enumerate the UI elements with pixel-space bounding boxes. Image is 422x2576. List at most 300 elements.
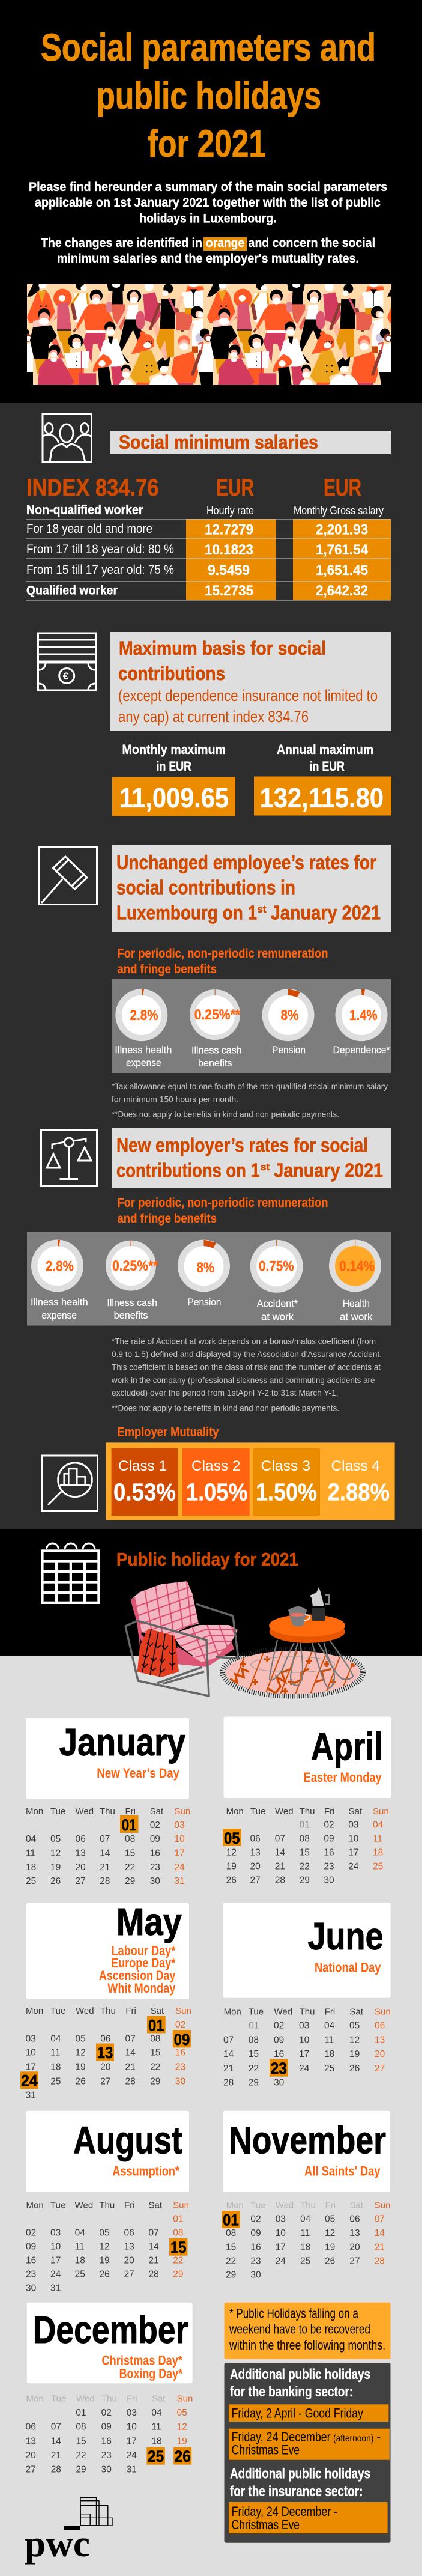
calendar grid: August: 18 [75, 2255, 85, 2265]
calendar grid: December: 23 [101, 2450, 112, 2461]
calendar grid: August: Fri [124, 2200, 134, 2210]
calendar grid: April: 06 [250, 1833, 261, 1844]
calendar grid: August: Mon [26, 2200, 44, 2210]
logo: pwc: pwc [25, 2524, 90, 2565]
calendar grid: August: 01 [173, 2214, 184, 2224]
calendar grid: April: 19 [226, 1861, 237, 1871]
calendar grid: August: 03 [50, 2228, 61, 2238]
changes note with orange highlight [41, 236, 375, 266]
footnotes: employer rates: work in the company (professional sickness and commuting accidents are [111, 1375, 375, 1385]
calendar grid: June: 03 [299, 2021, 309, 2031]
calendar grid: June: 23 [270, 2059, 287, 2077]
donut: accident at work: at work [261, 1311, 294, 1323]
subheading: employer remuneration: For periodic, non-periodic remuneration [118, 1196, 328, 1210]
calendar grid: November: 16 [250, 2242, 261, 2252]
donut: pension: 8% [197, 1260, 214, 1276]
intro text [29, 180, 387, 226]
monthly salaries: 1,651.45 [316, 562, 368, 579]
intro text: Please find hereunder a summary of the main social parameters [29, 180, 387, 194]
calendar grid: May: Sat [151, 2006, 164, 2016]
icon: gavel [40, 847, 97, 905]
calendar card: May: May [116, 1900, 182, 1943]
calendar grid: January: 06 [76, 1834, 86, 1844]
calendar grid: December: 06 [26, 2422, 36, 2432]
calendar grid: August: 02 [26, 2228, 36, 2238]
calendar card: November: All Saints' Day [304, 2164, 381, 2179]
calendar grid: April: 17 [348, 1847, 358, 1858]
title [41, 26, 376, 165]
changes note with orange highlight: orange [206, 236, 244, 250]
calendar grid: November: 09 [250, 2228, 261, 2238]
panel: maximum basis heading [110, 632, 391, 731]
hourly rates: 9.5459 [208, 562, 250, 579]
calendar grid: November: 24 [276, 2256, 286, 2266]
calendar grid: December: 07 [51, 2422, 61, 2432]
panel: employer rates heading: st [261, 1161, 270, 1173]
donut: illness health expense: 2.8% [46, 1259, 74, 1275]
calendar grid: August: 30 [26, 2283, 37, 2293]
calendar grid: June: 05 [349, 2021, 360, 2031]
calendar grid: May: 30 [175, 2076, 186, 2086]
calendar grid: December: 27 [26, 2465, 36, 2475]
calendar grid: December: 08 [76, 2422, 86, 2432]
donut: pension: 8% [281, 1007, 299, 1024]
calendar grid: June: 14 [223, 2049, 234, 2059]
calendar grid: April: 11 [373, 1833, 382, 1844]
calendar grid: January: 03 [174, 1820, 185, 1830]
calendar grid: August: Sat [149, 2200, 163, 2210]
hourly rates: 10.1823 [205, 542, 253, 558]
calendar grid: April: 07 [275, 1833, 285, 1844]
calendar grid: December: 29 [76, 2465, 86, 2475]
calendar grid: May: 05 [76, 2034, 86, 2044]
calendar grid: May: 29 [150, 2076, 160, 2086]
calendar grid: April: 03 [348, 1820, 358, 1830]
calendar grid: May: Fri [125, 2006, 136, 2016]
donut: health at work: Health [343, 1298, 370, 1310]
calendar grid: April: Mon [226, 1806, 244, 1817]
calendar grid: January: 19 [50, 1862, 61, 1873]
calendar card: January: New Year’s Day [97, 1766, 180, 1781]
calendar grid: December: 19 [177, 2436, 187, 2446]
calendar grid: November: 01 [223, 2211, 239, 2229]
donut: illness health expense: 2.8% [130, 1007, 158, 1024]
subheading: employer remuneration: and fringe benefits [118, 1212, 217, 1226]
monthly salaries: 1,761.54 [316, 542, 369, 558]
hourly rates [205, 521, 253, 599]
calendar grid: January: 21 [100, 1862, 110, 1873]
calendar grid: January: 23 [150, 1862, 160, 1873]
hourly rates: 12.7279 [205, 521, 253, 538]
calendar grid: May: 27 [100, 2076, 110, 2086]
calendar grid: January: 17 [174, 1848, 185, 1859]
calendar grid: August: 10 [50, 2241, 61, 2252]
calendar grid: August: 05 [99, 2228, 110, 2238]
calendar grid: December: 15 [76, 2436, 86, 2446]
calendar grid: January: 02 [150, 1820, 160, 1830]
calendar grid: April: 25 [373, 1861, 383, 1871]
calendar grid: January: 04 [26, 1834, 37, 1844]
calendar grid: April: 04 [373, 1820, 384, 1830]
footnotes: employee rates: **Does not apply to benefits in kind and non periodic payments. [112, 1109, 339, 1119]
calendar grid: December: Fri [127, 2394, 137, 2404]
calendar card: December: Christmas Day* [102, 2353, 182, 2368]
donut: illness cash benefits [106, 1241, 158, 1321]
calendar grid: April: 27 [250, 1875, 261, 1885]
calendar grid: August: 13 [124, 2241, 134, 2252]
calendar grid: January: 15 [125, 1848, 135, 1859]
calendar grid: June: 20 [375, 2049, 385, 2059]
panel: employee rates heading: social contributions in [116, 876, 295, 899]
calendar grid: November: 06 [349, 2214, 360, 2225]
calendar grid: April: 30 [324, 1875, 334, 1885]
calendar grid: January: 13 [76, 1848, 86, 1859]
calendar card: May: Labour Day* [112, 1943, 176, 1958]
footnotes: employer rates: This coefficient is based on the class of risk and the number of accidents at [112, 1362, 381, 1372]
calendar grid: June: 08 [249, 2035, 259, 2045]
donut: illness health expense: expense [42, 1310, 77, 1321]
calendar grid: January: Wed [76, 1806, 94, 1817]
donut: dependence: 1.4% [349, 1007, 378, 1024]
calendar grid: January: 16 [150, 1848, 160, 1859]
calendar grid: June: 15 [249, 2049, 259, 2059]
calendar grid: December: 14 [51, 2436, 61, 2446]
calendar grid: November: 27 [349, 2256, 360, 2266]
calendar card: June [223, 1903, 391, 1998]
donut: illness cash benefits [190, 989, 242, 1069]
subheading: employee remuneration: For periodic, non-periodic remuneration [118, 947, 328, 961]
panel: employer rates heading [112, 1128, 391, 1188]
donut: illness health expense [31, 1240, 88, 1321]
calendar grid: August: 22 [173, 2255, 184, 2265]
donut: illness cash benefits: Illness cash [107, 1297, 157, 1308]
calendar grid: May: Wed [76, 2006, 94, 2016]
calendar grid: December: 28 [51, 2465, 61, 2475]
panel: maximum basis heading: contributions [118, 663, 225, 684]
calendar grid: August: 15 [170, 2238, 186, 2256]
calendar grid: June: Wed [274, 2007, 292, 2017]
calendar grid: May: 21 [125, 2062, 136, 2072]
calendar grid: May: Mon [26, 2006, 43, 2016]
table header: EUR [216, 475, 254, 501]
callout: weekend recovery note: weekend have to be recovered [229, 2321, 370, 2336]
calendar grid: January: 09 [150, 1834, 160, 1844]
calendar grid: May: Thu [100, 2006, 116, 2016]
calendar grid: April: 18 [373, 1847, 383, 1858]
calendar grid: November: 07 [375, 2214, 385, 2225]
calendar grid: June: 29 [249, 2078, 259, 2088]
calendar grid: May: 23 [175, 2062, 185, 2072]
calendar card: May: Ascension Day [99, 1968, 176, 1983]
donut: illness cash benefits: Illness cash [191, 1044, 242, 1056]
calendar grid: November: 11 [300, 2228, 310, 2238]
calendar grid: November: Sun [375, 2200, 390, 2210]
class 2 [182, 1448, 250, 1516]
icon: banknote: € [63, 670, 69, 682]
class 4: Class 4 [331, 1458, 380, 1474]
calendar card: June: National Day [315, 1960, 381, 1975]
calendar grid: May: 18 [50, 2062, 61, 2072]
panel: maximum basis heading: any cap) at current index 834.76 [118, 708, 309, 726]
calendar grid: April: 26 [226, 1875, 237, 1885]
calendar card: January [26, 1718, 189, 1799]
calendar grid: January: 28 [100, 1876, 110, 1886]
calendar grid: August: 08 [173, 2228, 184, 2238]
calendar grid: November: 08 [226, 2228, 236, 2238]
row labels: From 15 till 17 year old: 75 % [26, 563, 174, 577]
calendar grid: August: 06 [124, 2228, 134, 2238]
calendar grid: August: 04 [75, 2228, 85, 2238]
icon: calendar [41, 1543, 100, 1604]
calendar grid: April: 01 [300, 1820, 310, 1830]
footnotes: employer rates: excluded) over the period from 1stApril Y-2 to 31st March Y-1. [112, 1388, 339, 1397]
donut: health at work [329, 1240, 381, 1323]
calendar grid: June: 13 [375, 2035, 385, 2045]
calendar grid: May: 28 [125, 2076, 136, 2086]
calendar grid: May: 19 [76, 2062, 86, 2072]
calendar grid: May: 17 [26, 2062, 36, 2072]
calendar grid: January [26, 1806, 190, 1886]
calendar grid: August: Sun [173, 2200, 189, 2210]
heading: insurance sector [230, 2466, 370, 2500]
donut: pension: Pension [187, 1296, 221, 1308]
footnotes: employee rates: for minimum 150 hours per month. [112, 1094, 238, 1104]
donut: dependence [333, 989, 390, 1056]
calendar grid: April: Fri [324, 1806, 335, 1817]
calendar grid: June: 10 [299, 2035, 310, 2045]
calendar grid: June: 06 [375, 2021, 385, 2031]
stat: annual maximum: 132,115.80 [260, 782, 384, 813]
calendar grid: May: 07 [125, 2034, 136, 2044]
calendar grid: June: 25 [324, 2064, 334, 2074]
calendar grid: January: Tue [50, 1806, 65, 1817]
table header: Monthly Gross salary [294, 505, 384, 517]
calendar grid: June: Tue [249, 2007, 264, 2017]
donut: illness health expense: expense [126, 1057, 161, 1069]
class 3: Class 3 [261, 1458, 310, 1474]
calendar grid: April: 15 [300, 1847, 310, 1858]
heading: banking sector: for the banking sector: [230, 2384, 353, 2400]
item: christmas eve afternoon: Christmas Eve [232, 2443, 300, 2458]
calendar grid: November: 04 [300, 2214, 311, 2225]
calendar grid: May: 14 [125, 2048, 136, 2058]
item: christmas eve afternoon [229, 2429, 390, 2460]
calendar grid: January: 24 [174, 1862, 185, 1873]
calendar grid: November: Thu [300, 2200, 316, 2210]
calendar grid: December: Wed [76, 2394, 95, 2404]
calendar grid: June: 04 [324, 2021, 335, 2031]
calendar grid: April: 10 [348, 1833, 359, 1844]
calendar grid: May: 16 [175, 2048, 185, 2058]
panel: employer rates heading: contributions on 1 [116, 1159, 260, 1182]
panel: employee rates heading: Unchanged employee’s rates for [116, 851, 376, 873]
calendar grid: April: 02 [324, 1820, 334, 1830]
class 2: 1.05% [186, 1478, 247, 1505]
calendar card: April: April [311, 1725, 383, 1768]
calendar grid: May: 09 [174, 2031, 190, 2049]
class 1: Class 1 [118, 1458, 167, 1474]
calendar grid: April [223, 1806, 389, 1885]
calendar grid: April: 16 [324, 1847, 334, 1858]
calendar grid: January: 01 [122, 1816, 137, 1834]
calendar grid: November: Fri [325, 2200, 336, 2210]
calendar grid: January: Fri [125, 1806, 136, 1817]
calendar grid: November: 02 [250, 2214, 261, 2225]
panel: employee rate donuts [112, 979, 391, 1073]
calendar grid: December: 02 [101, 2408, 112, 2418]
calendar grid: May: 13 [97, 2044, 113, 2062]
calendar grid: November: 30 [250, 2270, 261, 2280]
calendar grid: June: 02 [274, 2021, 284, 2031]
calendar grid: December: 17 [127, 2436, 137, 2446]
icon: banknote [38, 633, 96, 690]
icon: magnifier over chart [42, 1456, 97, 1511]
calendar grid: May: 31 [26, 2091, 36, 2101]
calendar grid: August: 26 [99, 2269, 110, 2279]
calendar grid: December [26, 2394, 193, 2475]
calendar grid: August: 25 [75, 2269, 85, 2279]
changes note with orange highlight: The changes are identified in [41, 236, 202, 250]
calendar grid: August: 27 [124, 2269, 134, 2279]
calendar grid: November: Mon [226, 2200, 244, 2210]
donut: illness health expense [115, 989, 172, 1069]
calendar grid: November [222, 2200, 390, 2280]
calendar grid: January: Sat [150, 1806, 164, 1817]
calendar grid: January: 07 [100, 1834, 110, 1844]
item: christmas eve: Christmas Eve [232, 2517, 300, 2532]
footnotes: employer rates: **Does not apply to benefits in kind and non periodic payments. [112, 1403, 339, 1413]
title: public holidays [96, 74, 321, 117]
intro text: holidays in Luxembourg. [139, 211, 276, 226]
item: christmas eve: Friday, 24 December - [232, 2504, 337, 2519]
calendar grid: December: 20 [26, 2450, 36, 2461]
calendar grid: August [26, 2200, 189, 2293]
donut: illness cash benefits: benefits [114, 1310, 148, 1321]
calendar grid: November: 28 [375, 2256, 385, 2266]
changes note with orange highlight: minimum salaries and the employer's mutuality rates. [57, 252, 359, 266]
heading: insurance sector: for the insurance sector: [230, 2483, 363, 2500]
calendar grid: May: 03 [26, 2034, 36, 2044]
item: christmas eve [229, 2502, 388, 2533]
class 2: Class 2 [191, 1458, 240, 1474]
calendar grid: June: 22 [249, 2064, 259, 2074]
changes note with orange highlight: and concern the social [249, 236, 375, 250]
calendar grid: August: 11 [75, 2241, 85, 2252]
calendar grid: January: 29 [125, 1876, 135, 1886]
donut: illness health expense: Illness health [115, 1044, 172, 1056]
panel: employer rate donuts [27, 1232, 391, 1325]
calendar grid: June: 12 [349, 2035, 360, 2045]
calendar grid: April: 05 [224, 1829, 240, 1847]
calendar grid: November: 12 [325, 2228, 335, 2238]
calendar grid: April: 14 [275, 1847, 285, 1858]
calendar card: August: Assumption* [112, 2164, 179, 2179]
calendar grid: August: 09 [26, 2241, 36, 2252]
calendar grid: December: Tue [51, 2394, 66, 2404]
donut: accident at work [250, 1240, 303, 1323]
callout: weekend recovery note: within the three following months. [229, 2338, 385, 2353]
calendar grid: January: 11 [26, 1848, 35, 1859]
calendar grid: August: 19 [99, 2255, 110, 2265]
class 3: 1.50% [256, 1478, 317, 1505]
heading: banking sector [230, 2366, 370, 2400]
panel: employee rates heading: Luxembourg on 1 [116, 902, 257, 924]
calendar grid: November: 18 [300, 2242, 310, 2252]
calendar grid: November: 14 [375, 2228, 385, 2238]
calendar grid: May: 04 [50, 2034, 61, 2044]
calendar grid: June: 17 [299, 2049, 309, 2059]
calendar grid: May: 02 [175, 2020, 185, 2030]
footnotes: employer rates: *The rate of Accident at work depends on a bonus/malus coefficient (from [112, 1336, 376, 1346]
calendar grid: June: 24 [299, 2064, 310, 2074]
calendar grid: May: 11 [50, 2048, 60, 2058]
calendar grid: November: 22 [226, 2256, 236, 2266]
icon: people [43, 414, 91, 463]
calendar grid: May [20, 2006, 191, 2101]
item: christmas eve afternoon: Friday, 24 December [232, 2429, 331, 2444]
footnotes: employer rates: 0.9 to 1.5) defined and displayed by the Association d’Assurance Accident. [112, 1349, 382, 1359]
calendar grid: November: Wed [276, 2200, 294, 2210]
calendar grid: June: Sun [375, 2007, 391, 2017]
table header: Hourly rate [206, 505, 254, 517]
calendar grid: November: 25 [300, 2256, 310, 2266]
footnotes: employer rates [111, 1336, 382, 1413]
class 3 [253, 1448, 320, 1516]
donut: health at work: 0.14% [339, 1259, 375, 1275]
calendar card: April [224, 1717, 391, 1798]
calendar grid: January: 30 [150, 1876, 160, 1886]
panel: employer rates heading: January 2021 [274, 1159, 383, 1182]
table: social minimum salaries [26, 475, 391, 601]
calendar grid: November: Sat [349, 2200, 364, 2210]
calendar grid: April: 21 [275, 1861, 285, 1871]
calendar card: November: November [229, 2119, 386, 2162]
calendar card: May: Whit Monday [107, 1981, 176, 1996]
calendar grid: April: Thu [300, 1806, 315, 1817]
calendar card: June: June [307, 1915, 383, 1958]
calendar grid: January: 20 [76, 1862, 86, 1873]
calendar card: August [26, 2111, 189, 2192]
calendar grid: April: 13 [250, 1847, 261, 1858]
calendar grid: January: Mon [26, 1806, 43, 1817]
calendar card: November [223, 2111, 390, 2192]
monthly salaries [316, 521, 369, 599]
stat: monthly maximum [112, 742, 235, 816]
calendar grid: December: 18 [151, 2436, 162, 2446]
donut: accident at work: 0.75% [259, 1259, 294, 1275]
callout: weekend recovery note [225, 2303, 390, 2359]
illustration: masked crowd [27, 284, 391, 385]
calendar grid: May: 10 [26, 2048, 36, 2058]
background: light grey calendars section [0, 1656, 422, 2576]
donut: pension [178, 1240, 230, 1308]
calendar grid: May: 08 [150, 2034, 160, 2044]
background: black holiday header [0, 1529, 422, 1656]
calendar grid: August: 31 [50, 2283, 61, 2293]
background: dark social parameters section [0, 403, 422, 1529]
panel: employer rates heading: New employer’s rates for social [116, 1134, 368, 1156]
calendar grid: December: 11 [151, 2422, 161, 2432]
calendar grid: December: 30 [101, 2465, 112, 2475]
subheading: employee remuneration: and fringe benefits [118, 962, 217, 976]
calendar grid: November: 21 [375, 2242, 385, 2252]
subheading: employer remuneration [118, 1196, 328, 1226]
calendar grid: December: 10 [127, 2422, 137, 2432]
subheading: employee remuneration [118, 947, 328, 976]
heading: insurance sector: Additional public holidays [230, 2466, 370, 2482]
calendar grid: June [223, 2007, 391, 2088]
calendar grid: December: 25 [148, 2447, 164, 2465]
